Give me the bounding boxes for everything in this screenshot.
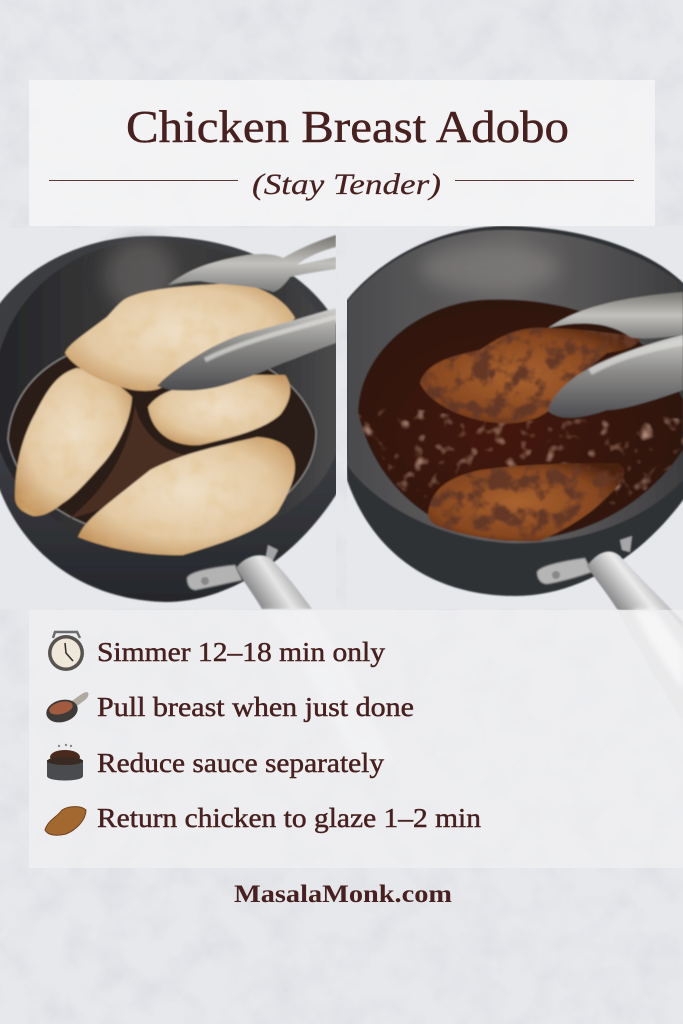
glaze texture	[420, 328, 640, 541]
title: Chicken Breast Adobo	[126, 102, 569, 152]
pan inner wall	[347, 230, 683, 543]
pan body	[340, 226, 683, 596]
chicken middle	[148, 375, 290, 445]
chicken texture	[24, 298, 274, 533]
pan handles	[236, 551, 683, 762]
steam on pan wall	[420, 244, 560, 292]
tip: reduce sauce	[47, 744, 385, 780]
icon: spoon of sauce	[44, 692, 88, 726]
photo: chicken glazed	[340, 226, 683, 609]
tip: simmer time	[48, 632, 386, 671]
chicken lifted	[65, 283, 295, 391]
upper tongs	[168, 235, 336, 292]
subtitle with rules: (Stay Tender)	[252, 168, 441, 201]
lower tongs	[548, 335, 683, 418]
pan bracket	[537, 558, 592, 584]
tip: reduce sauce: Reduce sauce separately	[97, 748, 385, 778]
pan bracket	[187, 565, 242, 590]
glazed chicken bottom	[428, 463, 624, 541]
glazed sauce	[358, 299, 683, 541]
pan inner wall	[0, 246, 336, 511]
icon: stopwatch clock	[48, 632, 84, 671]
icon: simmering pot	[47, 744, 83, 780]
photo: chicken before glazing	[0, 228, 345, 609]
lower tongs	[157, 308, 336, 391]
chicken bottom	[78, 437, 295, 555]
sauce highlights	[358, 408, 683, 511]
pan body	[0, 236, 345, 602]
tip: return chicken: Return chicken to glaze 1–2 min	[97, 803, 482, 833]
upper tongs	[548, 292, 683, 338]
footer website: MasalaMonk.com	[234, 881, 452, 908]
glazed chicken lifted	[420, 328, 640, 423]
tip: pull breast: Pull breast when just done	[97, 692, 414, 722]
panel: title	[29, 80, 655, 226]
tip: pull breast	[44, 692, 414, 726]
steam on pan wall	[105, 240, 175, 310]
tip: simmer time: Simmer 12–18 min only	[97, 637, 386, 667]
chicken left	[15, 368, 132, 516]
panel: tips	[29, 610, 683, 868]
sauce pool	[6, 354, 318, 525]
icon: glazed chicken piece	[45, 807, 86, 835]
